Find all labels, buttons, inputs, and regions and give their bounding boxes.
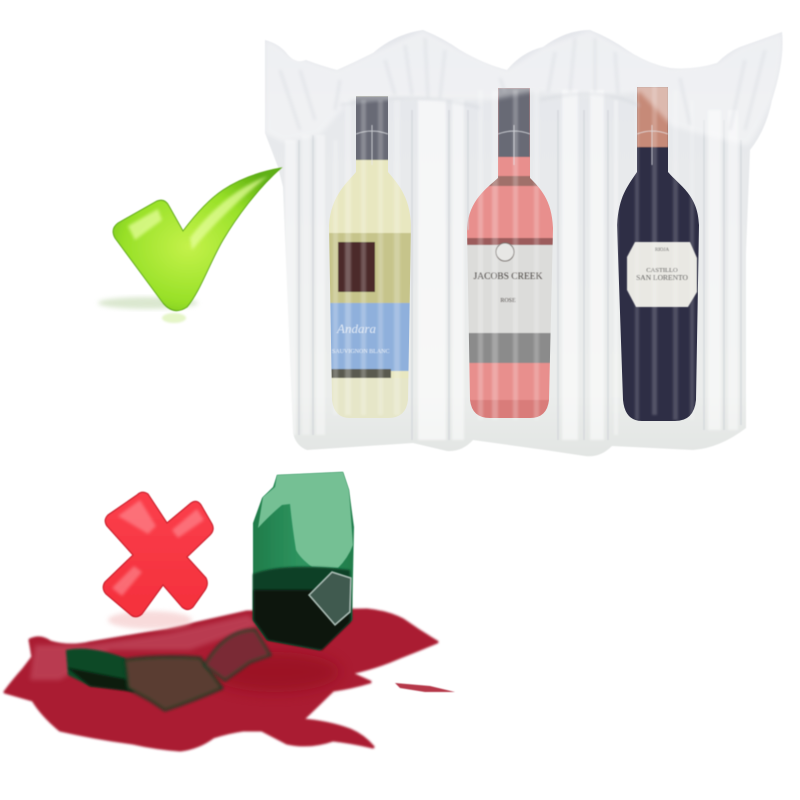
red wine label: [627, 242, 697, 307]
wine level inside bottle: [253, 567, 352, 650]
red wine label: SAN LORENTO: [636, 273, 688, 282]
pale spill upper area: [30, 615, 260, 680]
bottle neck ties: [356, 125, 668, 165]
icon: green check mark: [98, 168, 281, 323]
bottle tag: [309, 572, 351, 625]
light green shard: [258, 472, 353, 568]
dark wine in bottle: [254, 590, 350, 650]
white wine label text: SAUVIGNON BLANC: [332, 349, 390, 355]
fallen bottle shards: [125, 657, 222, 710]
check mark shape: [113, 168, 281, 311]
fallen bottle dark underside: [68, 668, 135, 692]
cross shape: [103, 492, 213, 617]
wine drip: [395, 683, 455, 692]
white wine label text: [332, 321, 390, 355]
translucent air columns: [285, 85, 738, 440]
rose wine label text: [474, 243, 543, 304]
rose wine label text: JACOBS CREEK: [474, 272, 543, 282]
white wine bottle: [329, 96, 411, 418]
cross highlight: [112, 500, 204, 596]
red wine label: RIOJA: [655, 248, 669, 253]
broken wine bottle and spill: [5, 472, 455, 750]
ruffle folds: [280, 38, 765, 130]
upright broken bottle base: [253, 472, 354, 650]
red wine bottle: [617, 87, 699, 421]
curled glass shard: [205, 630, 270, 680]
inflatable bag body: [265, 30, 783, 456]
wine spill: [5, 610, 437, 750]
fallen bottle neck fragment: [66, 649, 135, 690]
icon: red cross: [103, 492, 213, 629]
check mark reflection: [162, 313, 186, 323]
rose wine bottle: [467, 88, 553, 418]
column seams: [299, 110, 741, 440]
white wine label text: Andara: [336, 321, 376, 336]
rose wine label text: ROSE: [500, 298, 516, 304]
red wine label: CASTILLO: [646, 267, 678, 274]
inflated top ruffle: [265, 30, 783, 145]
cross reflection: [108, 611, 192, 629]
air column packaging with three bottles: [265, 30, 783, 456]
check mark highlight: [128, 176, 268, 250]
dark spill centre: [210, 652, 340, 692]
check mark ground shadow: [98, 297, 198, 309]
